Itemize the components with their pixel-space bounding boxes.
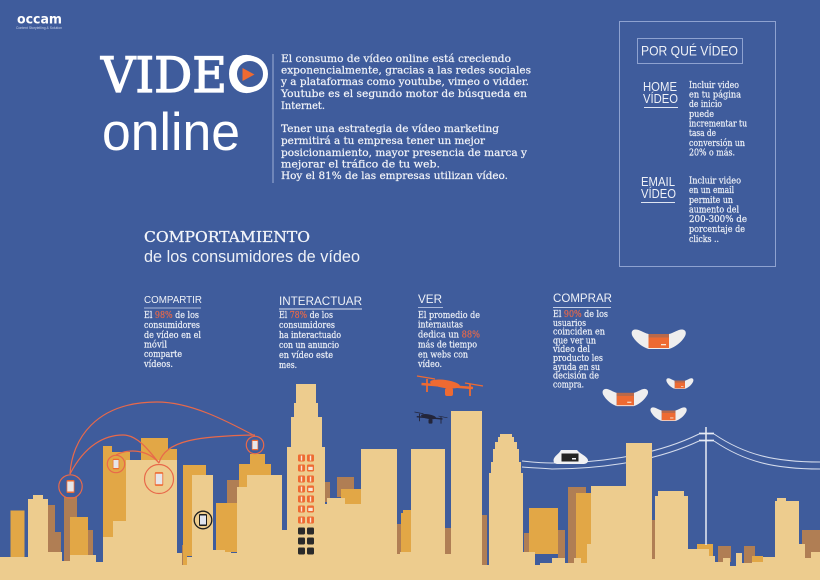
icon: phone one — [59, 475, 82, 498]
skyline: foreground buildings — [0, 384, 820, 580]
column: ver — [417, 294, 480, 370]
email vídeo text: porcentaje de — [689, 225, 745, 235]
column: ver: en webs con — [418, 350, 468, 360]
email vídeo text: permite un — [689, 196, 733, 206]
column: interactuar: mes. — [279, 361, 297, 371]
icon: orange drone — [417, 376, 483, 396]
column: ver: vídeo. — [417, 359, 442, 370]
title: VIDEO online: VIDEO — [100, 47, 266, 104]
column: interactuar: INTERACTUAR — [279, 296, 362, 308]
logo: occam: Content Storytelling & Solution — [16, 26, 62, 30]
column: comprar: compra. — [553, 380, 584, 390]
intro text: Youtube es el segundo motor de búsqueda en — [280, 88, 527, 100]
column: ver: internautas — [418, 320, 463, 330]
email vídeo label — [641, 175, 676, 203]
column: interactuar: con un anuncio — [279, 341, 339, 351]
panel heading: POR QUÉ VÍDEO — [641, 42, 738, 58]
column: compartir: consumidores — [144, 321, 200, 331]
heading: comportamiento: COMPORTAMIENTO — [144, 228, 310, 246]
home vídeo text: 20% o más. — [689, 148, 735, 158]
home vídeo text: incrementar tu — [689, 120, 747, 130]
winged delivery boxes — [603, 329, 693, 421]
home vídeo label: HOME — [643, 80, 677, 94]
title: VIDEO online — [100, 47, 266, 162]
column: compartir: COMPARTIR — [144, 294, 202, 306]
intro text: exponencialmente, gracias a las redes sociales — [281, 64, 531, 76]
home vídeo label: VÍDEO — [643, 91, 678, 106]
email vídeo text: en un email — [689, 186, 734, 196]
panel: por qué vídeo — [620, 22, 776, 266]
column: compartir: móvil — [144, 340, 167, 350]
column: comprar: que ver un — [553, 336, 596, 346]
icon: package carrier on the wire — [554, 450, 588, 464]
column: interactuar: El 78% de los — [279, 311, 333, 321]
heading: comportamiento — [144, 228, 360, 266]
column: ver: más de tiempo — [418, 340, 477, 350]
email vídeo text: Incluir video — [689, 176, 741, 186]
column: comprar — [552, 293, 612, 390]
email vídeo label: EMAIL — [641, 175, 675, 189]
intro text: mejorar el tráfico de tu web. — [281, 158, 440, 170]
logo: occam: occam — [17, 12, 62, 28]
home vídeo text: tasa de — [689, 129, 716, 139]
column: compartir — [143, 294, 202, 370]
intro text: Hoy el 81% de las empresas utilizan vídeo. — [281, 170, 508, 182]
network curves between phones — [70, 402, 255, 474]
home vídeo text: en tu página — [689, 90, 742, 100]
tower window icons — [298, 454, 314, 554]
column: compartir: de vídeo en el — [144, 330, 201, 341]
column: interactuar: ha interactuado — [279, 331, 341, 341]
intro text: Internet. — [281, 100, 325, 112]
panel heading — [638, 38, 742, 64]
column: ver: dedica un 88% — [418, 330, 480, 340]
column: comprar: producto les — [553, 354, 603, 364]
column: comprar: COMPRAR — [553, 293, 612, 305]
intro text: y a plataformas como youtube, vimeo o vidder. — [280, 76, 529, 88]
column: compartir: comparte — [144, 350, 182, 360]
heading: comportamiento: de los consumidores de vídeo — [144, 248, 360, 266]
home vídeo label — [643, 80, 678, 108]
email vídeo text: aumento del — [689, 206, 739, 216]
column: comprar: ayuda en su — [553, 363, 600, 373]
home vídeo text: puede — [689, 110, 714, 120]
intro text: posicionamiento, mayor presencia de marca y — [281, 147, 527, 159]
column: compartir: vídeos. — [143, 359, 173, 370]
column: comprar: usuarios — [553, 319, 586, 329]
home vídeo text: conversión un — [689, 138, 745, 149]
column: ver: VER — [418, 294, 442, 306]
icon: phone four — [246, 436, 264, 454]
intro text: El consumo de vídeo online está creciendo — [281, 53, 511, 65]
home vídeo text: Incluir video — [689, 81, 739, 91]
email vídeo text: 200-300% de — [689, 215, 747, 225]
column: ver: El promedio de — [418, 311, 480, 321]
column: interactuar — [279, 296, 362, 371]
icon: black phone — [194, 511, 212, 529]
home vídeo text — [689, 81, 747, 158]
column: comprar: decisión de — [553, 370, 599, 382]
icon: phone two — [107, 455, 125, 473]
email vídeo text: clicks .. — [689, 235, 719, 245]
home vídeo text: de inicio — [689, 100, 722, 110]
intro text — [280, 53, 531, 182]
power lines and pole — [522, 427, 820, 545]
intro text: permitirá a tu empresa tener un mejor — [281, 135, 486, 147]
email vídeo text — [689, 176, 747, 245]
column: comprar: coinciden en — [553, 328, 605, 338]
column: interactuar: en vídeo este — [279, 350, 333, 361]
column: comprar: El 90% de los — [553, 310, 608, 320]
title: VIDEO online: online — [102, 103, 240, 162]
column: interactuar: consumidores — [279, 321, 335, 331]
icon: play ring over the O — [234, 58, 266, 90]
column: comprar: vídeo del — [552, 344, 590, 355]
icon: black drone — [414, 412, 448, 424]
icon: phone three — [144, 464, 174, 494]
column: compartir: El 98% de los — [144, 311, 199, 321]
skyline: background buildings — [10, 438, 820, 567]
email vídeo label: VÍDEO — [641, 186, 676, 201]
intro text: Tener una estrategia de vídeo marketing — [281, 123, 499, 135]
